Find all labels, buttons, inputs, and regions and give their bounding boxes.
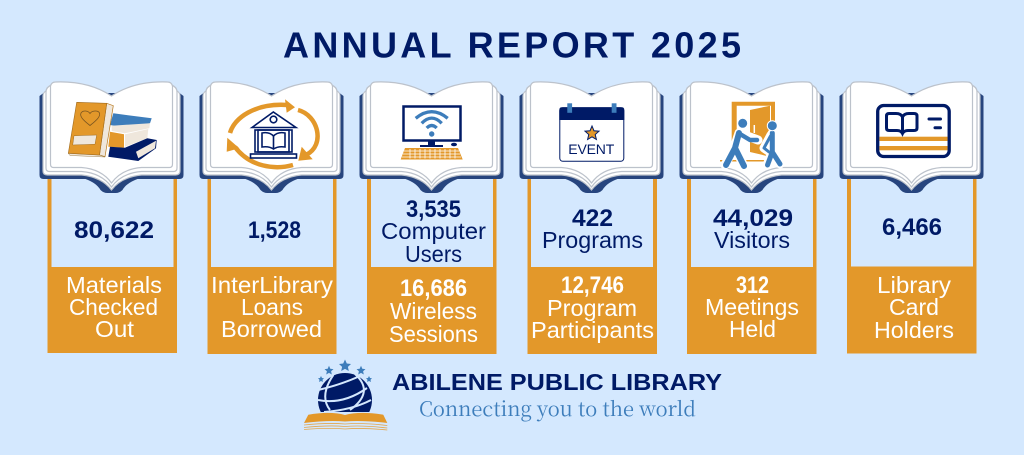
label: Users bbox=[405, 241, 462, 267]
open book bbox=[304, 413, 387, 423]
column frame bbox=[48, 170, 177, 353]
book shape bbox=[360, 82, 504, 193]
label: Loans bbox=[241, 294, 303, 320]
icon: event calendar: EVENT bbox=[568, 141, 615, 157]
tagline: Connecting you to the world bbox=[419, 393, 696, 422]
label: Checked bbox=[69, 294, 158, 320]
label: Borrowed bbox=[221, 316, 322, 342]
icon: stack of books bbox=[68, 102, 157, 161]
logo: globe on open book bbox=[304, 360, 387, 430]
label: Materials bbox=[66, 272, 162, 298]
label: participants: Program bbox=[547, 295, 637, 321]
icon: computer with wifi bbox=[401, 106, 463, 160]
label: Card bbox=[889, 294, 939, 320]
label: Library bbox=[877, 272, 952, 298]
column frame bbox=[367, 170, 496, 354]
icon: people at door bbox=[720, 102, 782, 166]
panel: programs bbox=[520, 82, 664, 354]
book shape bbox=[680, 82, 824, 193]
number: 44,029 bbox=[713, 205, 793, 232]
book shape bbox=[40, 82, 184, 193]
number: 1,528 bbox=[248, 217, 301, 244]
number: 80,622 bbox=[74, 217, 154, 244]
book shape bbox=[520, 82, 664, 193]
number: wireless: 16,686 bbox=[400, 275, 467, 302]
panel: computer users bbox=[360, 82, 504, 354]
stars bbox=[318, 360, 372, 382]
globe bbox=[318, 373, 372, 412]
label: participants: Participants bbox=[531, 317, 654, 343]
label: Out bbox=[95, 316, 135, 342]
label bbox=[211, 272, 334, 342]
icon: library with circular arrows bbox=[227, 99, 318, 167]
panel: interlibrary loans bbox=[200, 82, 344, 354]
label: Programs bbox=[542, 227, 643, 253]
label bbox=[874, 272, 954, 343]
book shape bbox=[840, 82, 984, 193]
number: meetings: 312 bbox=[736, 272, 769, 299]
icon: event calendar bbox=[559, 103, 624, 161]
number: participants: 12,746 bbox=[561, 272, 624, 299]
label bbox=[66, 272, 162, 342]
label: wireless: Sessions bbox=[389, 321, 478, 347]
icon: library card bbox=[878, 106, 949, 156]
label: participants bbox=[531, 295, 654, 343]
label: wireless bbox=[389, 298, 478, 347]
panel: library card holders bbox=[840, 82, 984, 353]
column frame bbox=[847, 170, 976, 354]
label: Computer bbox=[381, 218, 486, 244]
number: 422 bbox=[572, 205, 613, 232]
label: Holders bbox=[874, 317, 954, 343]
title: ANNUAL REPORT 2025 bbox=[283, 24, 741, 66]
panel: visitors bbox=[680, 82, 824, 354]
panel: materials checked out bbox=[40, 82, 184, 353]
label: meetings: Held bbox=[729, 316, 776, 342]
label: Visitors bbox=[714, 227, 790, 253]
label: InterLibrary bbox=[211, 272, 334, 298]
column frame bbox=[687, 170, 816, 354]
label: wireless: Wireless bbox=[390, 298, 477, 324]
book shape bbox=[200, 82, 344, 193]
label bbox=[381, 218, 486, 267]
label: meetings bbox=[705, 294, 799, 342]
column frame bbox=[208, 170, 336, 354]
number: 6,466 bbox=[882, 214, 942, 241]
organisation name: ABILENE PUBLIC LIBRARY bbox=[392, 369, 722, 395]
column frame bbox=[528, 170, 657, 354]
label: meetings: Meetings bbox=[705, 294, 799, 320]
number: 3,535 bbox=[406, 196, 461, 223]
